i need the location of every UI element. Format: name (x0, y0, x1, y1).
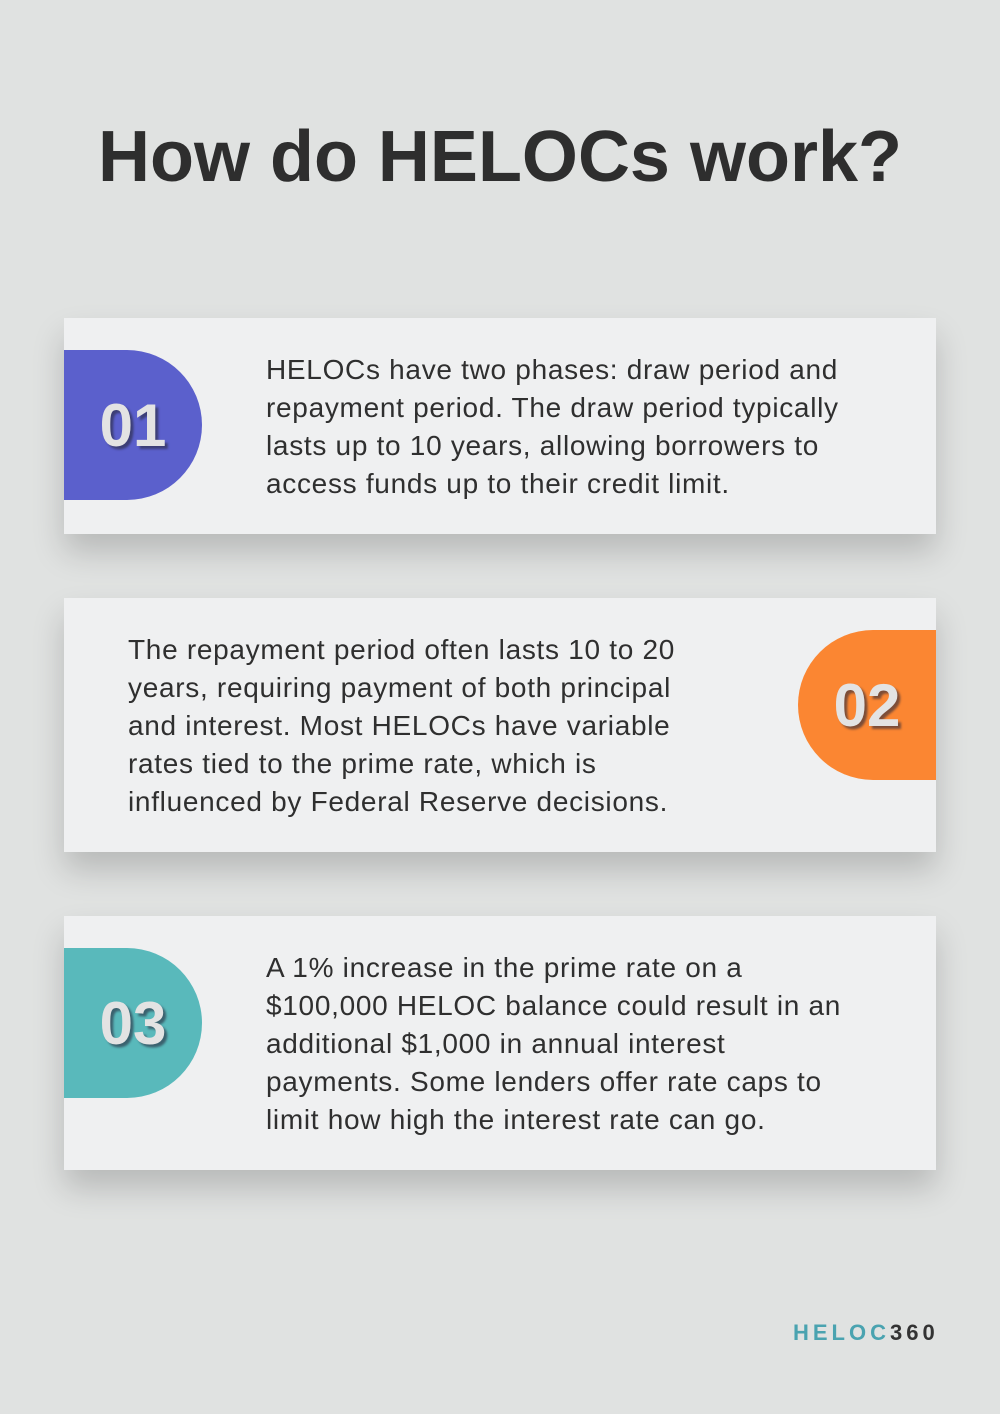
panel: card 2 (64, 598, 936, 852)
panel: card 3 (64, 916, 936, 1170)
panel: card 1 (64, 318, 936, 534)
text 3: payments. Some lenders offer rate caps to (266, 1066, 822, 1097)
text 1 (266, 354, 839, 499)
text 2: and interest. Most HELOCs have variable (128, 710, 670, 741)
text 3: $100,000 HELOC balance could result in an (266, 990, 841, 1021)
text 2: rates tied to the prime rate, which is (128, 748, 597, 779)
text 2: The repayment period often lasts 10 to 20 (128, 634, 675, 665)
badge 01 (64, 350, 202, 500)
text 1: repayment period. The draw period typically (266, 392, 839, 423)
logo: HELOC360 (793, 1320, 939, 1345)
text 3 (266, 952, 841, 1135)
text 2 (128, 634, 675, 817)
text 3: limit how high the interest rate can go. (266, 1104, 766, 1135)
text 2: influenced by Federal Reserve decisions. (128, 786, 668, 817)
badge 01: 01 (100, 392, 166, 458)
badge 03 (64, 948, 202, 1098)
text 1: access funds up to their credit limit. (266, 468, 730, 499)
text 1: lasts up to 10 years, allowing borrowers to (266, 430, 819, 461)
text 1: HELOCs have two phases: draw period and (266, 354, 838, 385)
title: How do HELOCs work? (98, 117, 902, 197)
text 3: A 1% increase in the prime rate on a (266, 952, 743, 983)
badge 03: 03 (100, 990, 166, 1056)
badge 02 (798, 630, 936, 780)
text 2: years, requiring payment of both principal (128, 672, 671, 703)
text 3: additional $1,000 in annual interest (266, 1028, 726, 1059)
badge 02: 02 (834, 672, 900, 738)
